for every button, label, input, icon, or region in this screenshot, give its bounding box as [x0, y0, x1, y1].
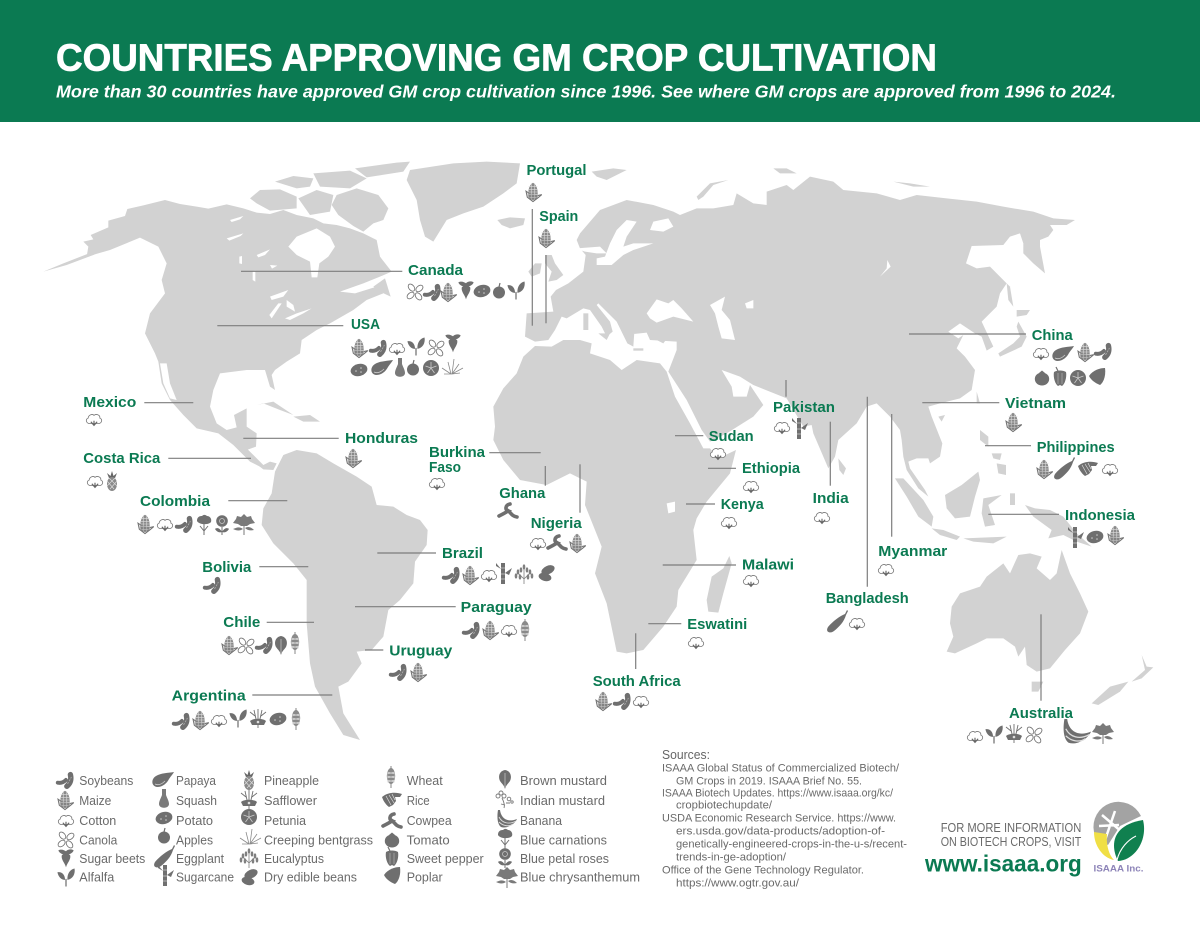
legend item: Petunia: Petunia	[264, 814, 306, 828]
icon: cotton	[721, 518, 737, 528]
country: South Africa	[593, 633, 681, 711]
country: Indonesia	[988, 507, 1136, 548]
icon: pineapple	[107, 471, 117, 491]
country: Honduras: Honduras	[345, 430, 418, 447]
icon: cotton	[87, 476, 103, 487]
icon: potato	[1085, 529, 1105, 545]
icon: alfalfa	[985, 725, 1003, 744]
icon: blue chrysanthemum	[233, 514, 255, 535]
icon: cotton	[481, 570, 497, 581]
country: Spain	[539, 208, 578, 323]
icon: sugarcane	[1068, 527, 1084, 548]
legend item: Alfalfa	[57, 868, 114, 886]
icon: alfalfa	[507, 281, 525, 300]
country: Paraguay	[355, 599, 532, 641]
country: Mexico	[83, 394, 193, 425]
icon: maize	[539, 229, 555, 248]
legend item: Pineapple: Pineapple	[264, 774, 319, 788]
legend item: Potato	[154, 810, 213, 828]
legend item: Papaya	[152, 772, 216, 788]
icon: maize	[463, 566, 479, 585]
country: Costa Rica: Costa Rica	[83, 450, 161, 467]
legend item: Cowpea: Cowpea	[407, 814, 452, 828]
country: Philippines	[985, 439, 1118, 479]
icon: potato	[472, 283, 492, 299]
world map	[43, 162, 1153, 740]
sources: https://www.ogtr.gov.au/	[676, 878, 799, 890]
sources: ers.usda.gov/data-products/adoption-of-	[676, 826, 885, 838]
country: Spain: Spain	[539, 208, 578, 225]
icon: banana	[1064, 719, 1091, 743]
country: Australia	[967, 614, 1114, 744]
Greenland, Iceland, Europe and Asia	[407, 162, 1075, 497]
icon: dry edible beans	[538, 563, 556, 583]
icon: eggplant	[827, 610, 848, 632]
icon: blue carnations	[197, 515, 211, 535]
icon: wheat	[521, 619, 529, 641]
title: COUNTRIES APPROVING GM CROP CULTIVATION	[56, 38, 937, 80]
icon: sweet pepper	[1054, 367, 1066, 386]
country: Burkina Faso: Faso	[429, 459, 461, 476]
icon: creeping bentgrass	[442, 359, 463, 374]
icon: cotton	[774, 422, 790, 433]
legend item: Safflower: Safflower	[264, 794, 317, 808]
icon: cowpea	[548, 536, 566, 549]
icon: maize	[483, 621, 499, 640]
icon: maize	[1037, 460, 1053, 479]
header band	[0, 0, 1200, 122]
legend item: Tomato: Tomato	[407, 834, 450, 848]
icon: soybeans	[444, 570, 457, 581]
country: Argentina: Argentina	[172, 688, 246, 704]
sources: Sources:	[662, 747, 710, 762]
legend item: Poplar	[384, 867, 443, 884]
legend item: Banana	[497, 810, 562, 828]
icon: cotton	[878, 564, 894, 575]
icon: soybeans	[371, 343, 384, 354]
legend item: Tomato	[385, 832, 450, 848]
legend item: Indian mustard: Indian mustard	[520, 794, 605, 808]
country: Kenya: Kenya	[721, 496, 764, 513]
legend item: Brown mustard: Brown mustard	[520, 774, 607, 788]
icon: soybeans	[425, 287, 438, 298]
icon: blue petal roses	[215, 515, 229, 535]
icon: cotton	[389, 344, 405, 354]
icon: cotton	[688, 638, 704, 648]
icon: maize	[222, 636, 238, 655]
icon: sugarcane	[496, 563, 512, 584]
sources: Office of the Gene Technology Regulator.	[662, 864, 864, 876]
call to action: FOR MORE INFORMATION	[941, 821, 1081, 835]
icon: brown mustard	[275, 636, 287, 655]
legend item: Sweet pepper: Sweet pepper	[407, 852, 484, 866]
icon: cotton	[710, 448, 726, 459]
icon: maize	[346, 449, 362, 468]
icon: canola	[1025, 726, 1043, 744]
country: Burkina Faso	[429, 444, 541, 489]
icon: potato	[268, 711, 288, 727]
country: Bolivia: Bolivia	[202, 559, 252, 576]
country: Chile	[222, 614, 314, 655]
icon: safflower	[250, 709, 266, 728]
legend item: Soybeans: Soybeans	[79, 774, 133, 788]
icon: petunia	[423, 360, 439, 376]
icon: cotton	[86, 414, 102, 425]
sources: ISAAA Global Status of Commercialized Biotech/	[662, 762, 899, 774]
icon: cowpea	[499, 504, 517, 517]
country: Argentina	[172, 688, 332, 730]
icon: papaya	[1052, 346, 1074, 361]
country: Nigeria	[530, 464, 586, 553]
icon: cotton	[429, 478, 445, 489]
country: Australia: Australia	[1009, 705, 1074, 722]
legend item: Blue petal roses	[498, 848, 609, 868]
sources: ISAAA Biotech Updates. https://www.isaaa.org/kc/	[662, 788, 893, 800]
legend item: Rice: Rice	[407, 794, 430, 808]
icon: cotton	[1033, 348, 1049, 359]
country: Canada	[241, 262, 525, 302]
icon: maize	[411, 663, 427, 682]
icon: alfalfa	[407, 337, 425, 356]
legend item: Potato: Potato	[176, 814, 213, 828]
icon: maize	[526, 183, 542, 202]
country: Ethiopia: Ethiopia	[742, 460, 801, 477]
call to action	[924, 821, 1082, 876]
icon: maize	[352, 339, 368, 358]
icon: cotton	[743, 576, 759, 586]
country: Vietnam: Vietnam	[1005, 395, 1066, 412]
country: Pakistan	[773, 380, 835, 439]
icon: soybeans	[615, 696, 628, 707]
legend item: Eucalyptus: Eucalyptus	[264, 852, 324, 866]
legend item: Sugarcane: Sugarcane	[176, 870, 234, 884]
icon: cotton	[211, 716, 227, 726]
country: Paraguay: Paraguay	[461, 599, 532, 616]
legend item: Cotton: Cotton	[79, 814, 116, 828]
icon: canola	[237, 637, 255, 655]
icon: soybeans	[205, 580, 218, 591]
country: Ghana: Ghana	[499, 485, 546, 502]
country: Portugal	[526, 162, 586, 326]
country: Costa Rica	[83, 450, 251, 491]
icon: cotton	[967, 732, 983, 742]
icon: maize	[1108, 526, 1124, 545]
legend item: Papaya: Papaya	[176, 774, 216, 788]
sources: GM Crops in 2019. ISAAA Brief No. 55.	[676, 776, 862, 788]
icon: blue chrysanthemum	[1092, 723, 1114, 744]
legend item: Blue petal roses: Blue petal roses	[520, 852, 609, 866]
icon: sugar beets	[458, 281, 474, 299]
legend item: Canola	[57, 831, 117, 849]
legend item: Blue chrysanthemum	[496, 867, 640, 888]
icon: safflower	[1006, 724, 1022, 743]
legend item: Wheat: Wheat	[407, 774, 443, 788]
icon: papaya	[371, 360, 393, 375]
icon: wheat	[291, 632, 299, 654]
icon: squash	[395, 358, 405, 377]
legend item: Sugar beets: Sugar beets	[79, 852, 145, 866]
legend item: Eucalyptus	[240, 848, 324, 868]
icon: potato	[349, 362, 369, 378]
icon: maize	[570, 534, 586, 553]
country: Ethiopia	[708, 460, 801, 492]
country: Philippines: Philippines	[1037, 439, 1115, 456]
icon: canola	[406, 283, 424, 301]
icon: cotton	[501, 626, 517, 636]
Southeast Asia, Australia and New Zealand	[895, 430, 1153, 705]
country: India	[813, 422, 849, 523]
country: Mexico: Mexico	[83, 394, 136, 411]
country: China	[909, 327, 1109, 386]
legend item: Dry edible beans: Dry edible beans	[264, 870, 357, 884]
country: China: China	[1032, 327, 1073, 344]
country: Honduras	[243, 430, 418, 468]
country: Kenya	[686, 496, 764, 528]
legend item: Maize	[58, 791, 111, 810]
icon: maize	[596, 692, 612, 711]
country: Colombia	[138, 493, 287, 535]
legend item: Dry edible beans	[241, 867, 357, 887]
country: Pakistan: Pakistan	[773, 399, 835, 416]
icon: wheat	[292, 708, 300, 730]
legend	[57, 766, 640, 888]
country: Canada: Canada	[408, 262, 464, 279]
icon: cotton	[743, 482, 759, 492]
legend item: Sugar beets	[58, 849, 145, 867]
icon: maize	[1078, 343, 1094, 362]
country: USA	[217, 316, 463, 378]
icon: sugarcane	[792, 418, 808, 439]
icon: maize	[138, 515, 154, 534]
country: Brazil: Brazil	[442, 545, 483, 562]
icon: eucalyptus	[515, 564, 533, 584]
icon: cotton	[157, 520, 173, 530]
legend item: Banana: Banana	[520, 814, 562, 828]
legend item: Eggplant	[154, 845, 225, 867]
icon: soybeans	[174, 716, 187, 727]
country: Eswatini: Eswatini	[687, 616, 747, 633]
icon: alfalfa	[229, 709, 247, 728]
country: Malawi: Malawi	[742, 556, 794, 574]
country: Bolivia	[202, 559, 308, 591]
legend item: Blue chrysanthemum: Blue chrysanthemum	[520, 870, 640, 884]
icon: maize	[441, 283, 457, 302]
country: Myanmar	[878, 414, 947, 575]
icon: sugar beets	[445, 334, 461, 352]
icon: soybeans	[177, 519, 190, 530]
icon: rice	[1078, 462, 1098, 476]
legend item: Poplar: Poplar	[407, 870, 443, 884]
ISAAA logo	[1093, 802, 1144, 874]
icon: maize	[193, 711, 209, 730]
icon: cotton	[849, 618, 865, 629]
country: USA: USA	[351, 316, 380, 333]
icon: soybeans	[464, 625, 477, 636]
icon: canola	[427, 339, 445, 357]
icon: poplar	[1089, 368, 1105, 385]
country: Chile: Chile	[223, 614, 260, 631]
sources: USDA Economic Research Service. https://www.	[662, 812, 896, 824]
country: Uruguay: Uruguay	[389, 642, 453, 660]
country: Portugal: Portugal	[526, 162, 586, 179]
country: Bangladesh: Bangladesh	[826, 590, 909, 607]
country: India: India	[813, 490, 849, 507]
South America	[243, 448, 428, 740]
icon: cotton	[633, 696, 649, 707]
icon: soybeans	[391, 667, 404, 678]
country: Nigeria: Nigeria	[531, 515, 582, 532]
country: Ghana	[499, 466, 546, 517]
icon: cotton	[530, 538, 546, 549]
legend item: Creeping bentgrass: Creeping bentgrass	[264, 834, 373, 848]
icon: soybeans	[1096, 346, 1109, 357]
icon: apples	[407, 360, 419, 376]
icon: petunia	[1070, 370, 1086, 386]
legend item: Apples	[158, 828, 213, 848]
legend item: Wheat	[387, 766, 443, 788]
legend item: Eggplant: Eggplant	[176, 852, 225, 866]
subtitle: More than 30 countries have approved GM crop cultivation since 1996. See where GM crops are approved from 1996 to 2024.	[56, 82, 1116, 102]
country: Indonesia: Indonesia	[1065, 507, 1136, 524]
country: Sudan	[675, 428, 754, 459]
legend item: Squash: Squash	[176, 794, 217, 808]
country: Sudan: Sudan	[709, 428, 754, 445]
country: Vietnam	[922, 395, 1066, 432]
legend item: Creeping bentgrass	[240, 829, 373, 848]
sources: trends-in-ge-adoption/	[676, 852, 786, 864]
sources	[662, 747, 907, 890]
legend item: Cowpea	[383, 814, 452, 828]
country: South Africa: South Africa	[593, 673, 681, 690]
country: Uruguay	[365, 642, 453, 682]
legend item: Pineapple	[244, 770, 319, 790]
legend item: Indian mustard	[496, 791, 605, 808]
legend item: Sweet pepper	[386, 847, 484, 866]
country: Colombia: Colombia	[140, 493, 211, 510]
icon: tomato	[1035, 370, 1049, 386]
logo text: ISAAA Inc.	[1094, 864, 1144, 874]
call to action: ON BIOTECH CROPS, VISIT	[941, 835, 1082, 849]
legend item: Cotton	[58, 814, 116, 828]
country: Eswatini	[648, 616, 747, 648]
sources: cropbiotechupdate/	[676, 800, 772, 812]
legend item: Alfalfa: Alfalfa	[79, 870, 114, 884]
legend item: Sugarcane	[158, 865, 234, 886]
legend item: Blue carnations: Blue carnations	[520, 834, 607, 848]
country: Malawi	[663, 556, 794, 586]
country: Myanmar: Myanmar	[878, 543, 947, 560]
country: Brazil	[377, 545, 556, 585]
call to action: www.isaaa.org	[924, 850, 1082, 876]
country: Bangladesh	[826, 397, 909, 632]
icon: cotton	[1102, 464, 1118, 475]
icon: eggplant	[1054, 457, 1075, 479]
legend item: Safflower	[241, 790, 317, 809]
legend item: Canola: Canola	[79, 834, 117, 848]
legend item: Brown mustard	[499, 770, 607, 789]
icon: maize	[1006, 413, 1022, 432]
legend item: Apples: Apples	[176, 834, 213, 848]
legend item: Maize: Maize	[79, 794, 111, 808]
legend item: Squash	[159, 789, 217, 808]
icon: cotton	[814, 512, 830, 523]
legend item: Petunia	[241, 809, 306, 828]
legend item: Blue carnations	[498, 829, 607, 849]
icon: soybeans	[257, 640, 270, 651]
legend item: Rice	[382, 793, 430, 808]
country: Burkina Faso: Burkina	[429, 444, 486, 461]
Africa	[493, 340, 736, 653]
icon: apples	[493, 283, 505, 298]
North America	[43, 162, 410, 468]
sources: genetically-engineered-crops-in-the-u-s/recent-	[676, 838, 907, 850]
